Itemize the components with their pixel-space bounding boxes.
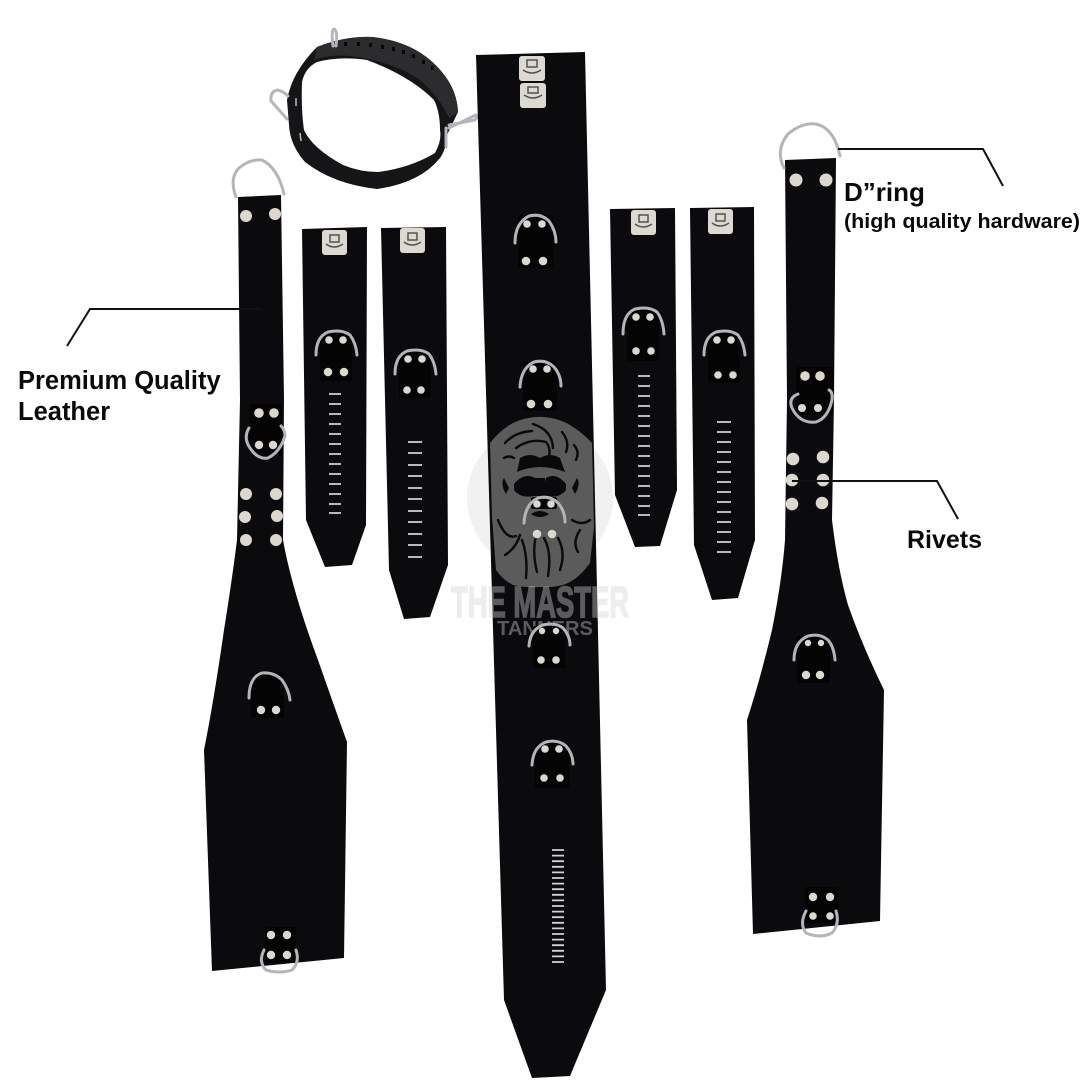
small strap 3	[610, 208, 677, 547]
watermark: brand head and wordmark: TANNERS	[497, 618, 593, 640]
D-ring tab 2	[520, 361, 561, 411]
D-ring tab 3	[524, 497, 565, 538]
watermark: brand head and wordmark	[451, 417, 629, 640]
D-ring tab 1	[515, 215, 556, 268]
right strap top D-ring	[780, 124, 840, 168]
buckle plates	[519, 56, 546, 108]
left strap top rivets	[240, 208, 281, 222]
callout: D-ring hardware	[838, 149, 1080, 233]
right strap top rivets	[790, 174, 832, 186]
long centre strap	[451, 52, 629, 1078]
callout: rivets: Rivets	[907, 526, 982, 554]
small strap 1	[302, 227, 367, 567]
left strap six rivets	[239, 488, 283, 546]
D-ring tab 5	[532, 741, 573, 788]
small strap 2	[381, 227, 448, 619]
left strap middle tab with D-ring	[249, 672, 290, 718]
right strap six rivets	[786, 451, 829, 510]
callout: premium quality leather: Leather	[18, 398, 110, 426]
D-ring tab	[395, 350, 436, 398]
buckle plate	[400, 228, 425, 253]
left wide strap	[204, 160, 347, 972]
D-ring tab 4	[529, 624, 570, 668]
collar: small leather strap loop	[271, 29, 477, 189]
buckle plate	[322, 230, 347, 255]
right strap bottom tab with D-ring	[802, 887, 838, 936]
lacing slots	[638, 376, 650, 515]
D-ring tab	[623, 308, 664, 361]
face features	[502, 455, 579, 517]
callout: rivets	[792, 481, 982, 554]
callout: D-ring hardware: (high quality hardware)	[844, 211, 1080, 233]
lacing slots	[717, 422, 731, 552]
callout: premium quality leather: Premium Quality	[18, 367, 221, 395]
left strap top D-ring	[233, 160, 284, 197]
right strap middle tab with D-ring	[794, 635, 835, 683]
right wide strap	[747, 124, 884, 936]
buckle plate	[708, 209, 733, 234]
right strap upper tab with D-ring	[791, 367, 833, 422]
D-ring tab	[316, 331, 357, 381]
buckle plate	[631, 210, 656, 235]
left strap bottom tab with D-ring	[261, 927, 297, 972]
callout: D-ring hardware: D”ring	[844, 177, 925, 207]
lacing slots	[329, 394, 341, 513]
D-ring tab	[704, 331, 745, 383]
wordmark: THE MASTER	[451, 578, 629, 627]
lacing slots	[552, 850, 564, 962]
left strap upper tab with D-ring	[246, 404, 285, 458]
lacing slots	[408, 442, 422, 557]
callout: premium quality leather	[18, 309, 261, 426]
watermark: background circle	[467, 425, 613, 571]
hair and beard strokes	[498, 424, 590, 578]
small strap 4	[690, 207, 755, 600]
